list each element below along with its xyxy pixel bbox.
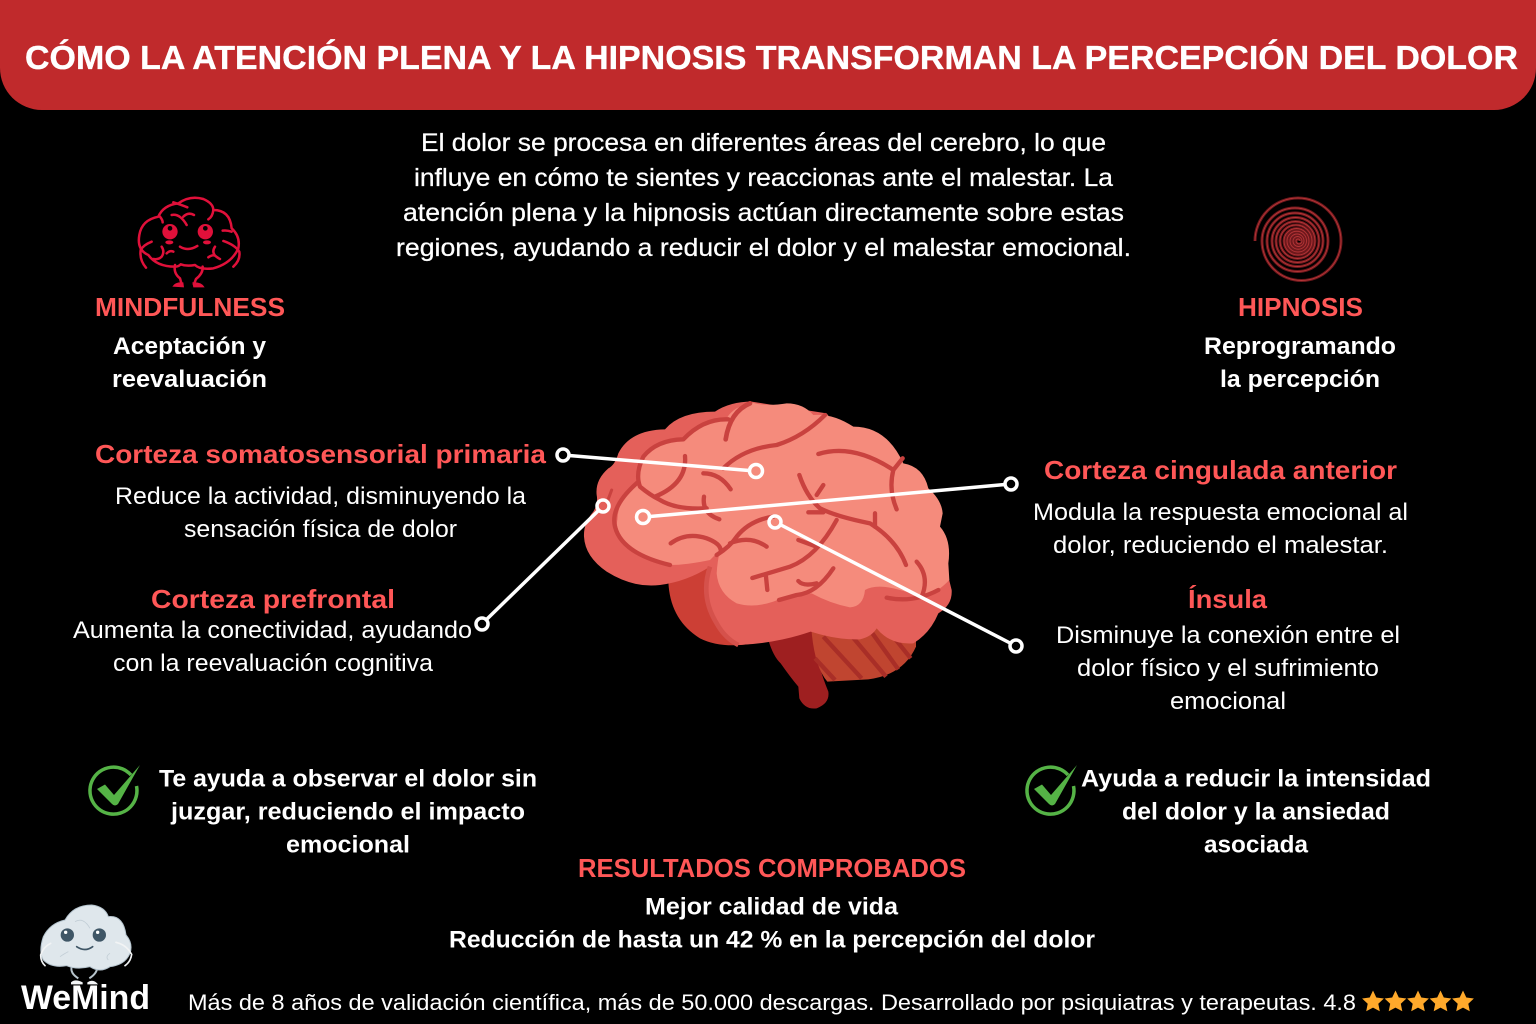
text block: ínsula: dolor físico y el sufrimiento: [1077, 655, 1379, 682]
callout: mindfulness benefit: [159, 766, 537, 858]
text block: corteza prefrontal: con la reevaluación cognitiva: [113, 650, 434, 677]
text block: corteza prefrontal: Corteza prefrontal: [151, 584, 395, 614]
header banner: [0, 0, 1536, 110]
text block: corteza somatosensorial primaria: sensación física de dolor: [184, 516, 457, 543]
intro text block: influye en cómo te sientes y reaccionas ante el malestar. La: [414, 164, 1113, 192]
text block: corteza somatosensorial primaria: Reduce la actividad, disminuyendo la: [115, 483, 527, 510]
arrow: corteza somatosensorial connector: [557, 449, 762, 478]
panel: hipnosis heading: [1204, 292, 1396, 393]
intro text block: [396, 129, 1131, 262]
arrow: corteza prefrontal connector: [476, 500, 609, 630]
text block: ínsula: [1056, 584, 1400, 715]
arrow: corteza cingulada connector: [636, 478, 1017, 524]
results block: RESULTADOS COMPROBADOS: [578, 853, 966, 883]
intro text block: atención plena y la hipnosis actúan directamente sobre estas: [403, 199, 1124, 227]
text block: ínsula: emocional: [1170, 688, 1286, 715]
icon: mindfulness brain character: [139, 198, 240, 287]
text block: corteza cingulada anterior: Modula la respuesta emocional al: [1033, 499, 1408, 526]
icon: wemind mascot: [41, 905, 132, 984]
icon: green check right: [1027, 765, 1077, 814]
text block: corteza prefrontal: [73, 584, 472, 677]
text block: corteza somatosensorial primaria: [95, 439, 547, 543]
panel: mindfulness heading: [95, 292, 285, 393]
title: CÓMO LA ATENCIÓN PLENA Y LA HIPNOSIS TRANSFORMAN LA PERCEPCIÓN DEL DOLOR: [25, 39, 1518, 77]
text block: corteza cingulada anterior: dolor, reduciendo el malestar.: [1053, 532, 1388, 559]
callout: hipnosis benefit: asociada: [1204, 832, 1309, 858]
text block: corteza cingulada anterior: [1033, 455, 1408, 559]
text block: ínsula: Disminuye la conexión entre el: [1056, 622, 1400, 649]
text block: corteza prefrontal: Aumenta la conectividad, ayudando: [73, 617, 472, 644]
callout: hipnosis benefit: del dolor y la ansiedad: [1122, 798, 1390, 826]
arrow: ínsula connector: [769, 516, 1022, 652]
logo text: WeMind: WeMind: [21, 979, 150, 1017]
callout: hipnosis benefit: [1081, 766, 1431, 858]
panel: hipnosis heading: la percepción: [1220, 366, 1380, 393]
results block: Reducción de hasta un 42 % en la percepción del dolor: [449, 926, 1095, 954]
panel: hipnosis heading: HIPNOSIS: [1238, 292, 1363, 322]
text block: corteza somatosensorial primaria: Corteza somatosensorial primaria: [95, 439, 547, 469]
footer credentials: Más de 8 años de validación científica, más de 50.000 descargas. Desarrollado por psiquiatras y terapeutas. 4.8: [188, 990, 1356, 1015]
text block: corteza cingulada anterior: Corteza cingulada anterior: [1044, 455, 1397, 485]
brain illustration: [584, 402, 952, 709]
panel: mindfulness heading: Aceptación y: [113, 333, 267, 360]
panel: mindfulness heading: reevaluación: [112, 366, 267, 393]
text block: ínsula: Ínsula: [1188, 584, 1268, 614]
callout: mindfulness benefit: emocional: [286, 832, 410, 858]
callout: hipnosis benefit: Ayuda a reducir la intensidad: [1081, 766, 1431, 792]
panel: hipnosis heading: Reprogramando: [1204, 333, 1396, 360]
intro text block: regiones, ayudando a reducir el dolor y el malestar emocional.: [396, 234, 1131, 262]
intro text block: El dolor se procesa en diferentes áreas del cerebro, lo que: [421, 129, 1106, 157]
connector lines: [476, 449, 1022, 652]
icon: green check left: [90, 765, 140, 814]
icon: five rating stars: [1362, 990, 1474, 1011]
callout: mindfulness benefit: juzgar, reduciendo el impacto: [170, 798, 525, 826]
icon: hypnosis spiral: [1255, 198, 1341, 280]
results block: Mejor calidad de vida: [645, 894, 899, 920]
callout: mindfulness benefit: Te ayuda a observar el dolor sin: [159, 766, 537, 792]
panel: mindfulness heading: MINDFULNESS: [95, 292, 285, 322]
results block: [449, 853, 1095, 954]
